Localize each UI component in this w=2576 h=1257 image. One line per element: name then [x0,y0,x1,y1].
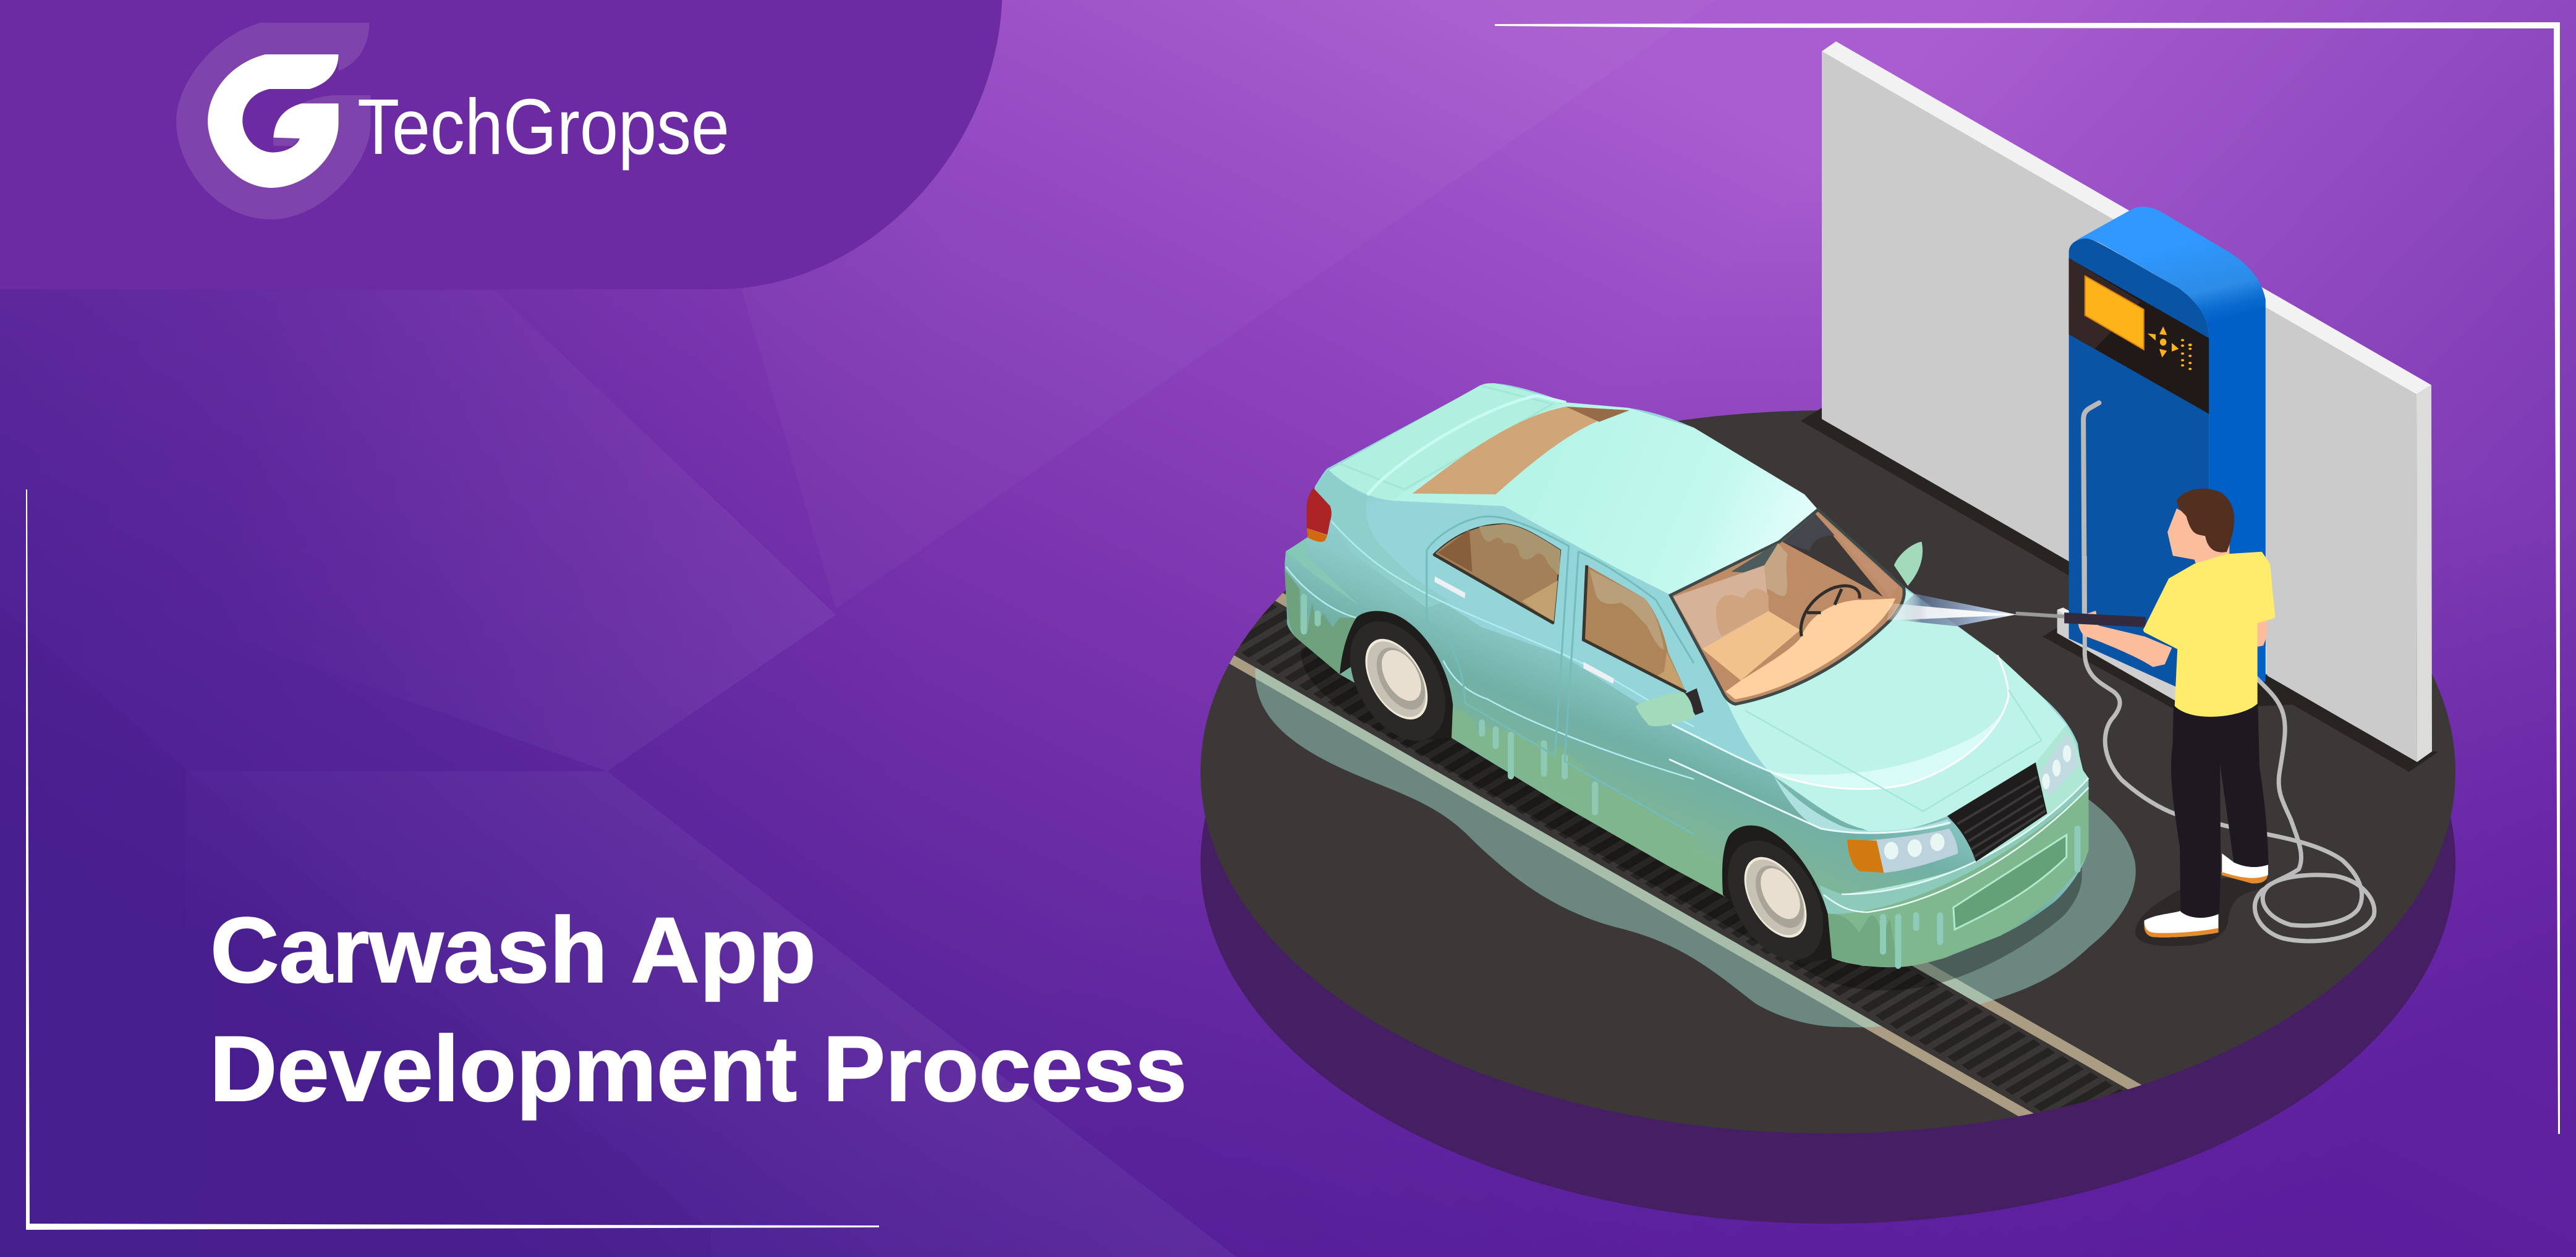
hose, wand and person [2016,552,2374,946]
screen [2085,276,2144,350]
front details [1669,509,2089,967]
white frame: bottom left [26,489,879,1230]
upper side panel [1364,501,1771,772]
grille [1947,763,2047,861]
logo: TechGropse [176,23,729,219]
water puddle [1255,600,2136,1027]
side green dirt [1452,705,1694,865]
tail light [1307,488,1332,542]
kiosk base [2057,607,2266,701]
car shadow [1301,618,2082,991]
title line 1: Carwash App [210,898,816,1002]
hood front water band [1774,777,1950,834]
jet spray [1887,594,2017,626]
person shirt [2143,552,2275,717]
kiosk base shadow [2043,628,2311,711]
trunk outline [1338,386,1552,489]
dirt drips [1304,597,1595,812]
front wheel [1708,824,1843,976]
logo panel [0,0,1002,289]
windshield [1670,509,1904,704]
lower fascia [1819,778,2089,914]
hose [2085,556,2374,941]
drain grate [1234,601,2128,1114]
foot shadow [2135,878,2268,946]
front wheel arch [1722,826,1832,964]
rear window [1413,407,1630,494]
person trousers [2171,701,2269,918]
control buttons [2148,326,2192,370]
roof [1391,402,1818,595]
hood [1724,589,2067,832]
drain rails [1229,593,2141,1116]
blue wash kiosk [2069,207,2266,701]
person far arm [2255,618,2268,648]
person shoes [2144,853,2268,937]
bumper highlight [1824,778,2089,912]
hood sheen outline [1771,655,2009,789]
fender crease [1669,724,1950,833]
side windows and trim [1307,488,1686,692]
pressure wand [2016,612,2146,627]
body creases [1286,521,1694,779]
rear glass sheen [1367,396,1566,495]
control panel [2069,258,2209,414]
title line 2: Development Process [210,1017,1187,1120]
rear face panel [1315,470,1449,608]
platform shadow [1201,501,2455,1224]
far mirror [1894,542,1923,586]
front fascia band [1842,724,2089,894]
rear green dirt [1285,569,1356,674]
rear details [1285,383,1694,865]
near mirror [1636,692,1694,726]
kiosk side and top [2076,207,2266,682]
trunk [1328,383,1566,501]
front side window [1583,565,1686,692]
rear side window [1434,524,1560,623]
bumper intake [1953,835,2067,929]
left headlight [1847,829,1958,873]
front bumper [1828,787,2089,966]
door seams [1427,517,1694,834]
kiosk front [2069,239,2209,701]
white frame: top right [1495,22,2560,1134]
person head [2167,489,2234,567]
logo mark: G [176,23,371,219]
title [210,898,1187,1120]
door handles [1434,577,1613,684]
darker front bumper dirt [1828,914,1898,967]
right headlight [2040,734,2078,795]
person near arm [2078,611,2172,667]
steering wheel [1801,586,1860,637]
logo wordmark: TechGropse [357,83,729,171]
bumper drips [1883,829,2078,966]
hood panel seam [1745,690,2042,811]
wall hose on kiosk [2083,403,2099,619]
car [1285,383,2089,976]
platform ground [1201,410,2455,1133]
mirror stem [1683,688,1704,715]
car body [1285,383,2088,967]
kiosk wall [1801,41,2439,772]
rear wheel [1330,605,1465,757]
hood sheen [1771,696,2009,789]
rear wheel arch [1340,611,1453,740]
